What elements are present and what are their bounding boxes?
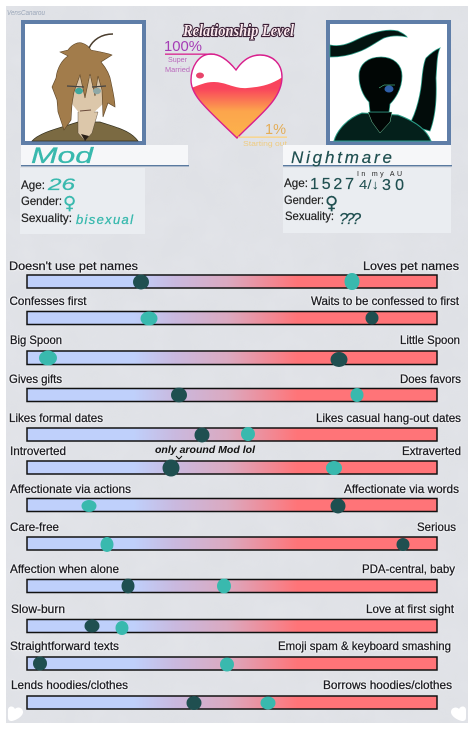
slider: texting <box>10 639 451 672</box>
label: 100 percent: Super <box>168 57 188 64</box>
slider: romance pace: Love at first sight <box>366 602 455 616</box>
slider: texting: Straightforward texts <box>10 639 119 653</box>
info box: Mod: Gender: <box>21 194 62 208</box>
label: 1 percent <box>238 121 287 148</box>
slider: seriousness: Serious <box>417 520 456 534</box>
info box: Nightmare: ♀ <box>325 193 338 214</box>
slider: hoodies: Lends hoodies/clothes <box>11 678 128 692</box>
name box: Mod: Mod <box>31 143 94 168</box>
info box: Mod: Sexuality: <box>21 211 72 225</box>
info box: Nightmare: Age: <box>284 176 308 190</box>
panel: Nightmare profile <box>283 22 452 233</box>
info box: Nightmare: 30 <box>382 177 404 194</box>
info box: Nightmare: ??? <box>339 211 361 228</box>
slider: confessing: Confesses first <box>10 294 87 308</box>
slider: seriousness: Care-free <box>10 520 59 534</box>
slider: introversion <box>10 444 461 476</box>
info box: Nightmare: In my AU <box>357 171 402 178</box>
slider: spooning <box>10 333 460 367</box>
slider: confessing: Waits to be confessed to first <box>311 294 460 308</box>
slider: affection style: Affectionate via words <box>344 482 459 496</box>
slider: public affection <box>10 562 455 594</box>
slider: gifts <box>9 372 461 402</box>
info box: Nightmare: Sexuality: <box>285 209 334 223</box>
slider: dates <box>9 411 461 442</box>
slider: hoodies: Borrows hoodies/clothes <box>323 678 452 692</box>
panel: Mod profile <box>20 22 189 234</box>
slider: gifts: Gives gifts <box>9 372 62 386</box>
watermark: VensCanarou <box>7 10 45 17</box>
icon: white heart bottom right <box>451 706 466 721</box>
info box: Mod: ♀ <box>63 193 76 214</box>
label: 1 percent: 1% <box>265 121 286 138</box>
info box: Mod: 26 <box>47 175 76 194</box>
slider: pet names: Loves pet names <box>363 259 459 273</box>
slider: dates: Likes formal dates <box>9 411 103 425</box>
heart meter <box>188 54 284 140</box>
slider: confessing <box>10 294 460 326</box>
name box: Nightmare: Nightmare <box>291 148 392 167</box>
slider: public affection: PDA-central, baby <box>362 562 455 576</box>
slider: introversion: Extraverted <box>402 444 461 458</box>
label: 100 percent <box>164 38 215 74</box>
slider: affection style <box>10 482 459 514</box>
slider: romance pace <box>11 602 455 635</box>
slider: introversion: Introverted <box>10 444 66 458</box>
slider: texting: Emoji spam & keyboard smashing <box>278 639 451 653</box>
panel: relationship level heart <box>164 21 294 148</box>
portrait: Nightmare <box>328 22 449 143</box>
info box: Mod: bisexual <box>76 212 134 227</box>
slider: gifts: Does favors <box>400 372 461 386</box>
slider: public affection: Affection when alone <box>10 562 119 576</box>
icon: white heart bottom left <box>8 706 23 721</box>
info box: Nightmare: 4/↓ <box>359 177 379 192</box>
slider: romance pace: Slow-burn <box>11 602 65 616</box>
slider: dates: Likes casual hang-out dates <box>316 411 461 425</box>
slider: pet names <box>9 259 459 290</box>
slider: hoodies <box>11 678 452 710</box>
portrait: Mod <box>23 22 144 143</box>
info box: Nightmare: 1527 <box>310 176 354 193</box>
info box: Mod <box>20 168 145 234</box>
info box: Nightmare: Gender: <box>284 193 324 207</box>
label: 1 percent: Starting out <box>243 141 287 148</box>
title: Relationship Level <box>182 21 294 40</box>
info box: Nightmare <box>283 168 451 233</box>
slider: pet names: Doesn't use pet names <box>9 259 138 273</box>
label: 100 percent: Married <box>165 67 190 74</box>
info box: Mod: Age: <box>21 178 45 192</box>
name box: Mod <box>21 143 189 168</box>
handwritten note: only around Mod lol <box>155 445 255 456</box>
name box: Nightmare <box>283 145 452 167</box>
slider: affection style: Affectionate via actions <box>10 482 131 496</box>
slider: spooning: Big Spoon <box>10 333 62 347</box>
slider: seriousness <box>10 520 456 552</box>
label: 100 percent: 100% <box>164 38 202 55</box>
slider: spooning: Little Spoon <box>400 333 460 347</box>
